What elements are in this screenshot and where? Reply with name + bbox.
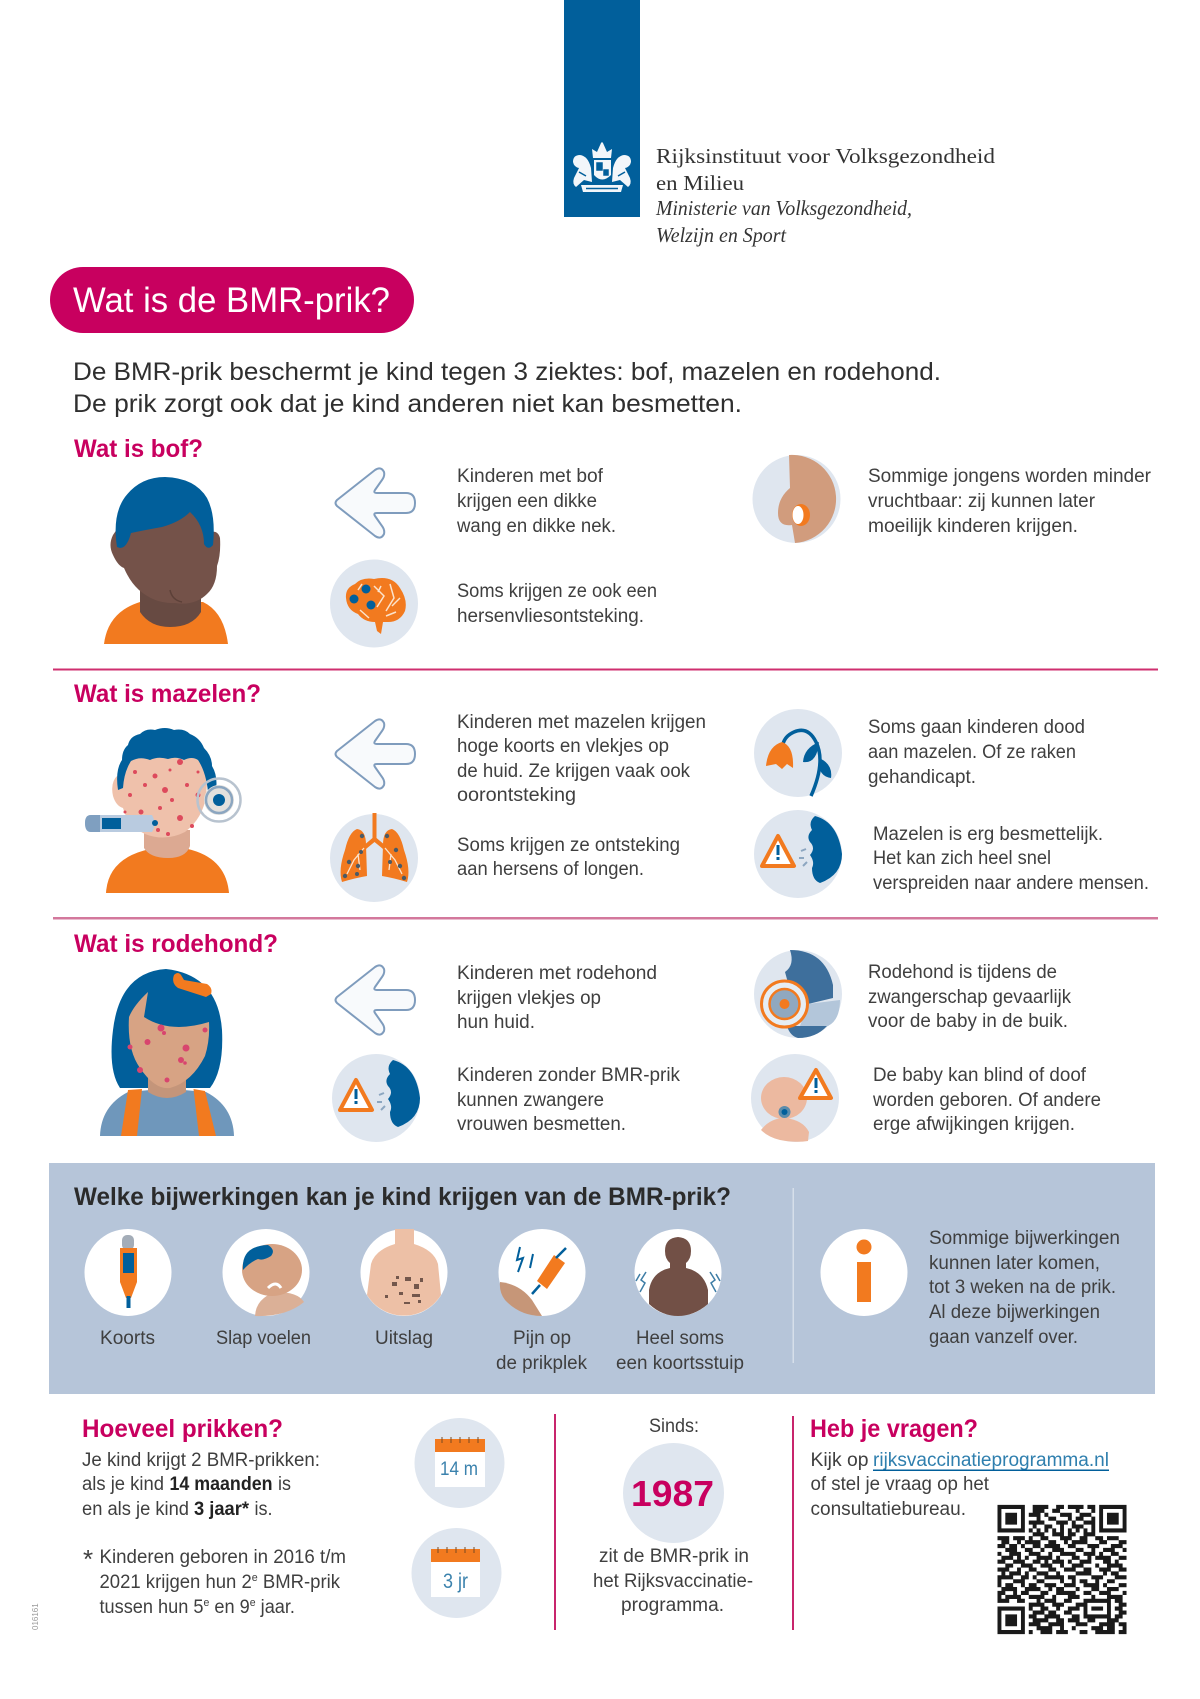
divider 1	[53, 668, 1158, 670]
arrow: mazelen	[336, 719, 415, 789]
footnote: *	[83, 1544, 93, 1574]
text: danger for baby: zwangerschap gevaarlijk	[868, 987, 1071, 1008]
text: fever and spots: Kinderen met mazelen krijgen	[457, 712, 706, 733]
text: fertility: moeilijk kinderen krijgen.	[868, 516, 1078, 537]
text: spots on skin: Kinderen met rodehond	[457, 963, 657, 984]
text: doses	[82, 1450, 320, 1520]
text: contact: rijksvaccinatieprogramma.nl	[873, 1450, 1109, 1471]
organisation name: Welzijn en Sport	[656, 223, 787, 247]
illustration: boy with measles	[85, 728, 240, 893]
icon: thermometer	[84, 1229, 172, 1316]
illustration: girl with rubella	[100, 969, 234, 1136]
text: doses: als je kind	[82, 1474, 164, 1495]
text: spots on skin	[457, 963, 657, 1033]
icon: calendar 14 m	[414, 1418, 504, 1508]
label: Pijn op de prikplek: Pijn op	[513, 1328, 571, 1349]
arrow: bof	[336, 468, 415, 538]
text: meningitis	[457, 581, 657, 627]
side effects note: gaan vanzelf over.	[929, 1327, 1078, 1348]
text: contagious	[873, 824, 1149, 894]
icon: brain	[330, 560, 418, 648]
title pill	[50, 267, 414, 333]
badge: 1987	[623, 1443, 724, 1543]
text: blind or deaf: worden geboren. Of andere	[872, 1090, 1101, 1111]
text: bof cheek: wang en dikke nek.	[456, 516, 616, 537]
text: death or disability: aan mazelen. Of ze raken	[868, 742, 1076, 763]
side effects note: Al deze bijwerkingen	[929, 1302, 1100, 1323]
text: programme: zit de BMR-prik in	[599, 1546, 749, 1567]
icon: lungs	[330, 813, 418, 902]
icon: calendar 14 m: 14 m	[440, 1459, 478, 1480]
footnote: tussen hun 5	[100, 1597, 208, 1618]
text: doses: 3 jaar*	[194, 1499, 250, 1520]
icon: injection pain	[498, 1229, 586, 1316]
divider 2	[53, 917, 1158, 920]
text: inflammation: Soms krijgen ze ontsteking	[457, 835, 680, 856]
organisation name	[655, 144, 996, 247]
icon: contagion warning 2	[332, 1054, 420, 1142]
icon: baby with warning	[751, 1054, 839, 1142]
text: programme	[593, 1546, 753, 1616]
text: fertility: Sommige jongens worden minder	[868, 466, 1152, 487]
intro text: De BMR-prik beschermt je kind tegen 3 ziektes: bof, mazelen en rodehond.	[73, 358, 941, 386]
footnote: e	[252, 1572, 258, 1584]
heading: rodehond: Wat is rodehond?	[74, 930, 278, 958]
text: contagious: Mazelen is erg besmettelijk.	[873, 824, 1103, 845]
text: doses: Je kind krijgt 2 BMR-prikken:	[82, 1450, 320, 1471]
label: Pijn op de prikplek	[496, 1328, 587, 1374]
label: Heel soms een koortsstuip	[616, 1328, 744, 1374]
text: death or disability: Soms gaan kinderen dood	[868, 717, 1085, 738]
text: doses: is.	[254, 1499, 272, 1520]
vertical divider left	[554, 1414, 556, 1630]
document code: 016161	[31, 1603, 40, 1630]
icon: wilted flower	[754, 709, 842, 797]
organisation name: Ministerie van Volksgezondheid,	[655, 196, 912, 220]
text: programme: het Rijksvaccinatie-	[593, 1571, 753, 1592]
icon: calendar 3 jr: 3 jr	[443, 1570, 468, 1593]
text: programme: programma.	[621, 1595, 724, 1616]
intro text	[73, 358, 941, 418]
text: contact	[810, 1450, 1109, 1520]
text: fever and spots: hoge koorts en vlekjes op	[457, 736, 669, 757]
heading: bof: Wat is bof?	[74, 435, 203, 463]
footnote	[83, 1544, 346, 1618]
text: spots on skin: krijgen vlekjes op	[457, 988, 601, 1009]
text: danger for baby: Rodehond is tijdens de	[868, 962, 1057, 983]
text: doses: is	[278, 1474, 291, 1495]
text: contact: of stel je vraag op het	[810, 1474, 990, 1495]
text: blind or deaf: De baby kan blind of doof	[873, 1065, 1087, 1086]
icon: testicle	[752, 455, 840, 543]
footnote: 2021 krijgen hun 2	[100, 1572, 256, 1593]
heading: hoeveel prikken: Hoeveel prikken?	[82, 1415, 283, 1443]
footnote: e	[250, 1597, 256, 1609]
text: danger for baby: voor de baby in de buik.	[868, 1011, 1068, 1032]
text: contagious: Het kan zich heel snel	[873, 848, 1051, 869]
text: bof cheek: Kinderen met bof	[457, 466, 604, 487]
arrow: rodehond	[336, 965, 415, 1035]
text: meningitis: Soms krijgen ze ook een	[457, 581, 657, 602]
text: fertility	[868, 466, 1152, 537]
icon: sick child	[222, 1229, 310, 1316]
text: death or disability	[868, 717, 1085, 788]
panel divider	[792, 1188, 794, 1363]
text: doses: 14 maanden	[170, 1474, 272, 1495]
text: inflammation	[457, 835, 680, 880]
text: contagious: verspreiden naar andere mensen.	[873, 873, 1149, 894]
footnote: en 9	[209, 1597, 250, 1618]
text: infect pregnant women: Kinderen zonder BMR-prik	[457, 1065, 680, 1086]
text: death or disability: gehandicapt.	[868, 767, 976, 788]
label: Heel soms een koortsstuip: een koortsstuip	[616, 1353, 744, 1374]
text: spots on skin: hun huid.	[457, 1012, 535, 1033]
footnote: BMR-prik	[258, 1572, 340, 1593]
label: Uitslag: Uitslag	[375, 1328, 433, 1349]
text: infect pregnant women: vrouwen besmetten.	[457, 1114, 626, 1135]
label: Koorts: Koorts	[100, 1328, 155, 1349]
organisation name: Rijksinstituut voor Volksgezondheid	[656, 144, 996, 168]
label: Slap voelen: Slap voelen	[216, 1328, 311, 1349]
footnote: Kinderen geboren in 2016 t/m	[100, 1547, 346, 1568]
icon: febrile seizure	[634, 1229, 722, 1316]
text: bof cheek: krijgen een dikke	[457, 491, 597, 512]
intro text: De prik zorgt ook dat je kind anderen niet kan besmetten.	[73, 390, 742, 418]
icon: rash	[360, 1229, 448, 1316]
text: contact: Kijk op	[810, 1450, 868, 1471]
side effects heading: Welke bijwerkingen kan je kind krijgen van de BMR-prik?	[74, 1183, 731, 1211]
QR code	[998, 1505, 1127, 1634]
label: Heel soms een koortsstuip: Heel soms	[636, 1328, 724, 1349]
text: danger for baby	[868, 962, 1071, 1032]
heading: vragen: Heb je vragen?	[810, 1415, 978, 1443]
footnote: e	[204, 1597, 209, 1609]
text: meningitis: hersenvliesontsteking.	[457, 606, 644, 627]
label: Pijn op de prikplek: de prikplek	[496, 1353, 587, 1374]
illustration: boy with mumps	[104, 477, 228, 644]
icon: calendar 3 jr	[412, 1528, 502, 1618]
text: fever and spots	[457, 712, 706, 806]
vertical divider right	[792, 1416, 794, 1630]
heading: mazelen: Wat is mazelen?	[74, 680, 261, 708]
text: bof cheek	[456, 466, 616, 537]
text: infect pregnant women: kunnen zwangere	[457, 1090, 604, 1111]
text: blind or deaf: erge afwijkingen krijgen.	[873, 1114, 1075, 1135]
text: doses: en als je kind	[82, 1499, 189, 1520]
text: fertility: vruchtbaar: zij kunnen later	[868, 491, 1096, 512]
text: blind or deaf	[872, 1065, 1101, 1135]
logo: Rijksoverheid blue ribbon with coat of arms	[564, 0, 640, 217]
text: fever and spots: de huid. Ze krijgen vaak ook	[457, 761, 690, 782]
text: inflammation: aan hersens of longen.	[457, 859, 644, 880]
icon: information	[820, 1229, 908, 1316]
icon: pregnant belly	[754, 950, 842, 1038]
since label: Sinds:	[649, 1416, 699, 1437]
badge: 1987: 1987	[631, 1473, 714, 1514]
side effects note	[929, 1228, 1120, 1348]
text: contact: consultatiebureau.	[810, 1499, 966, 1520]
footnote: jaar.	[256, 1597, 295, 1618]
side effects note: tot 3 weken na de prik.	[929, 1277, 1116, 1298]
side effects note: Sommige bijwerkingen	[929, 1228, 1120, 1249]
panel: side effects	[49, 1163, 1155, 1394]
icon: contagion warning	[754, 810, 842, 898]
text: fever and spots: oorontsteking	[457, 785, 576, 806]
side effects note: kunnen later komen,	[929, 1253, 1100, 1274]
organisation name: en Milieu	[656, 171, 745, 195]
title pill: Wat is de BMR-prik?	[73, 281, 390, 320]
text: infect pregnant women	[457, 1065, 680, 1135]
